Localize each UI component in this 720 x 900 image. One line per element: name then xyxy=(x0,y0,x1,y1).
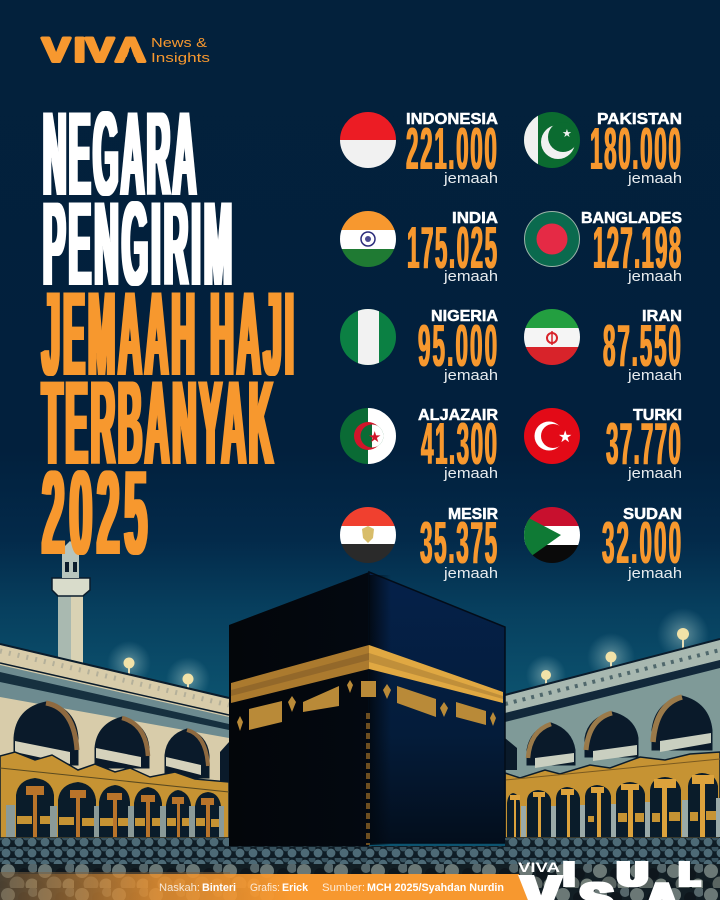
country: Nigeria: jemaah xyxy=(443,367,498,384)
illustration: lamps and glow xyxy=(107,608,709,701)
country: India: INDIA xyxy=(452,210,498,227)
country: Nigeria: NIGERIA xyxy=(431,308,498,325)
kiswah gold band xyxy=(231,645,369,703)
country: Banglades: BANGLADES xyxy=(581,210,682,227)
Kaaba right face xyxy=(369,572,505,843)
illustration: minaret xyxy=(52,541,90,665)
title: NEGARA xyxy=(43,86,196,221)
title: 2025 xyxy=(42,446,147,579)
logo: VIVA News & Insights xyxy=(42,31,211,69)
country: Sudan: 32.000 xyxy=(602,511,681,576)
country: Pakistan: 180.000 xyxy=(590,117,681,182)
illustration: left mosque colonnade xyxy=(0,644,229,846)
country: Turki: 37.770 xyxy=(606,412,681,477)
flag: Turkey xyxy=(524,408,580,464)
country: Indonesia: 221.000 xyxy=(406,117,497,182)
country: Banglades: jemaah xyxy=(627,268,682,285)
country: Iran: IRAN xyxy=(642,308,682,325)
footer credits xyxy=(159,882,504,894)
country: Sudan: SUDAN xyxy=(623,506,682,523)
logo: VIVA VISUAL: L xyxy=(680,856,699,894)
flag: Nigeria xyxy=(340,309,396,365)
country: Indonesia: jemaah xyxy=(443,170,498,187)
footer credits: Binteri xyxy=(202,882,236,894)
footer credits: Sumber: xyxy=(322,882,365,894)
flag: Indonesia xyxy=(340,112,396,168)
door strip xyxy=(366,713,370,845)
country: Mesir: jemaah xyxy=(443,565,498,582)
Kaaba left face xyxy=(229,572,369,846)
Kaaba corner shade xyxy=(369,575,391,845)
country: Aljazair: ALJAZAIR xyxy=(418,407,498,424)
illustration: Kaaba xyxy=(229,572,505,846)
flag: Algeria xyxy=(340,408,396,464)
footer credits: Grafis: xyxy=(250,882,280,894)
flag: India xyxy=(340,211,396,268)
logo: VIVA VISUAL: VIVA xyxy=(518,859,560,875)
logo: VIVA VISUAL: I xyxy=(564,856,574,894)
country: Pakistan: jemaah xyxy=(627,170,682,187)
country: India: jemaah xyxy=(443,268,498,285)
flag: Pakistan xyxy=(524,112,580,168)
logo: VIVA News & Insights: Insights xyxy=(151,50,211,65)
country: Nigeria: 95.000 xyxy=(418,314,497,379)
footer bar xyxy=(0,874,528,900)
flag: Sudan xyxy=(523,507,581,564)
logo: VIVA News & Insights: VIVA xyxy=(42,31,146,69)
country: Iran: jemaah xyxy=(627,367,682,384)
country: Sudan: jemaah xyxy=(627,565,682,582)
country: India: 175.025 xyxy=(407,216,497,281)
flag: Pakistan: ★ xyxy=(562,128,572,140)
flag: Iran xyxy=(524,309,580,366)
footer credits: MCH 2025/Syahdan Nurdin xyxy=(367,882,504,894)
logo: VIVA VISUAL xyxy=(518,856,699,900)
logo: VIVA VISUAL: U xyxy=(618,856,647,894)
country: Iran: 87.550 xyxy=(603,314,681,379)
country: Turki: TURKI xyxy=(633,407,682,424)
country: Pakistan: PAKISTAN xyxy=(597,111,682,128)
flag: Bangladesh xyxy=(524,212,580,266)
title: PENGIRIM xyxy=(43,176,232,311)
title: JEMAAH HAJI xyxy=(42,266,294,401)
country: Aljazair: 41.300 xyxy=(421,412,497,477)
illustration: crowd xyxy=(0,838,720,900)
country: Mesir: 35.375 xyxy=(420,511,497,576)
flag: Egypt xyxy=(340,507,396,563)
country: Indonesia: INDONESIA xyxy=(406,111,498,128)
title xyxy=(42,86,294,579)
kiswah panels xyxy=(249,681,486,730)
footer credits: Naskah: xyxy=(159,882,200,894)
logo: VIVA News & Insights: News & xyxy=(151,35,207,50)
title: TERBANYAK xyxy=(42,355,273,490)
footer credits: Erick xyxy=(282,882,309,894)
country: Aljazair: jemaah xyxy=(443,465,498,482)
country: Turki: jemaah xyxy=(627,465,682,482)
flag: Turkey: ★ xyxy=(558,429,572,446)
flag: Algeria: ★ xyxy=(368,429,381,446)
country: Mesir: MESIR xyxy=(448,506,498,523)
country: Banglades: 127.198 xyxy=(593,216,681,281)
illustration: right mosque colonnade xyxy=(505,639,720,846)
